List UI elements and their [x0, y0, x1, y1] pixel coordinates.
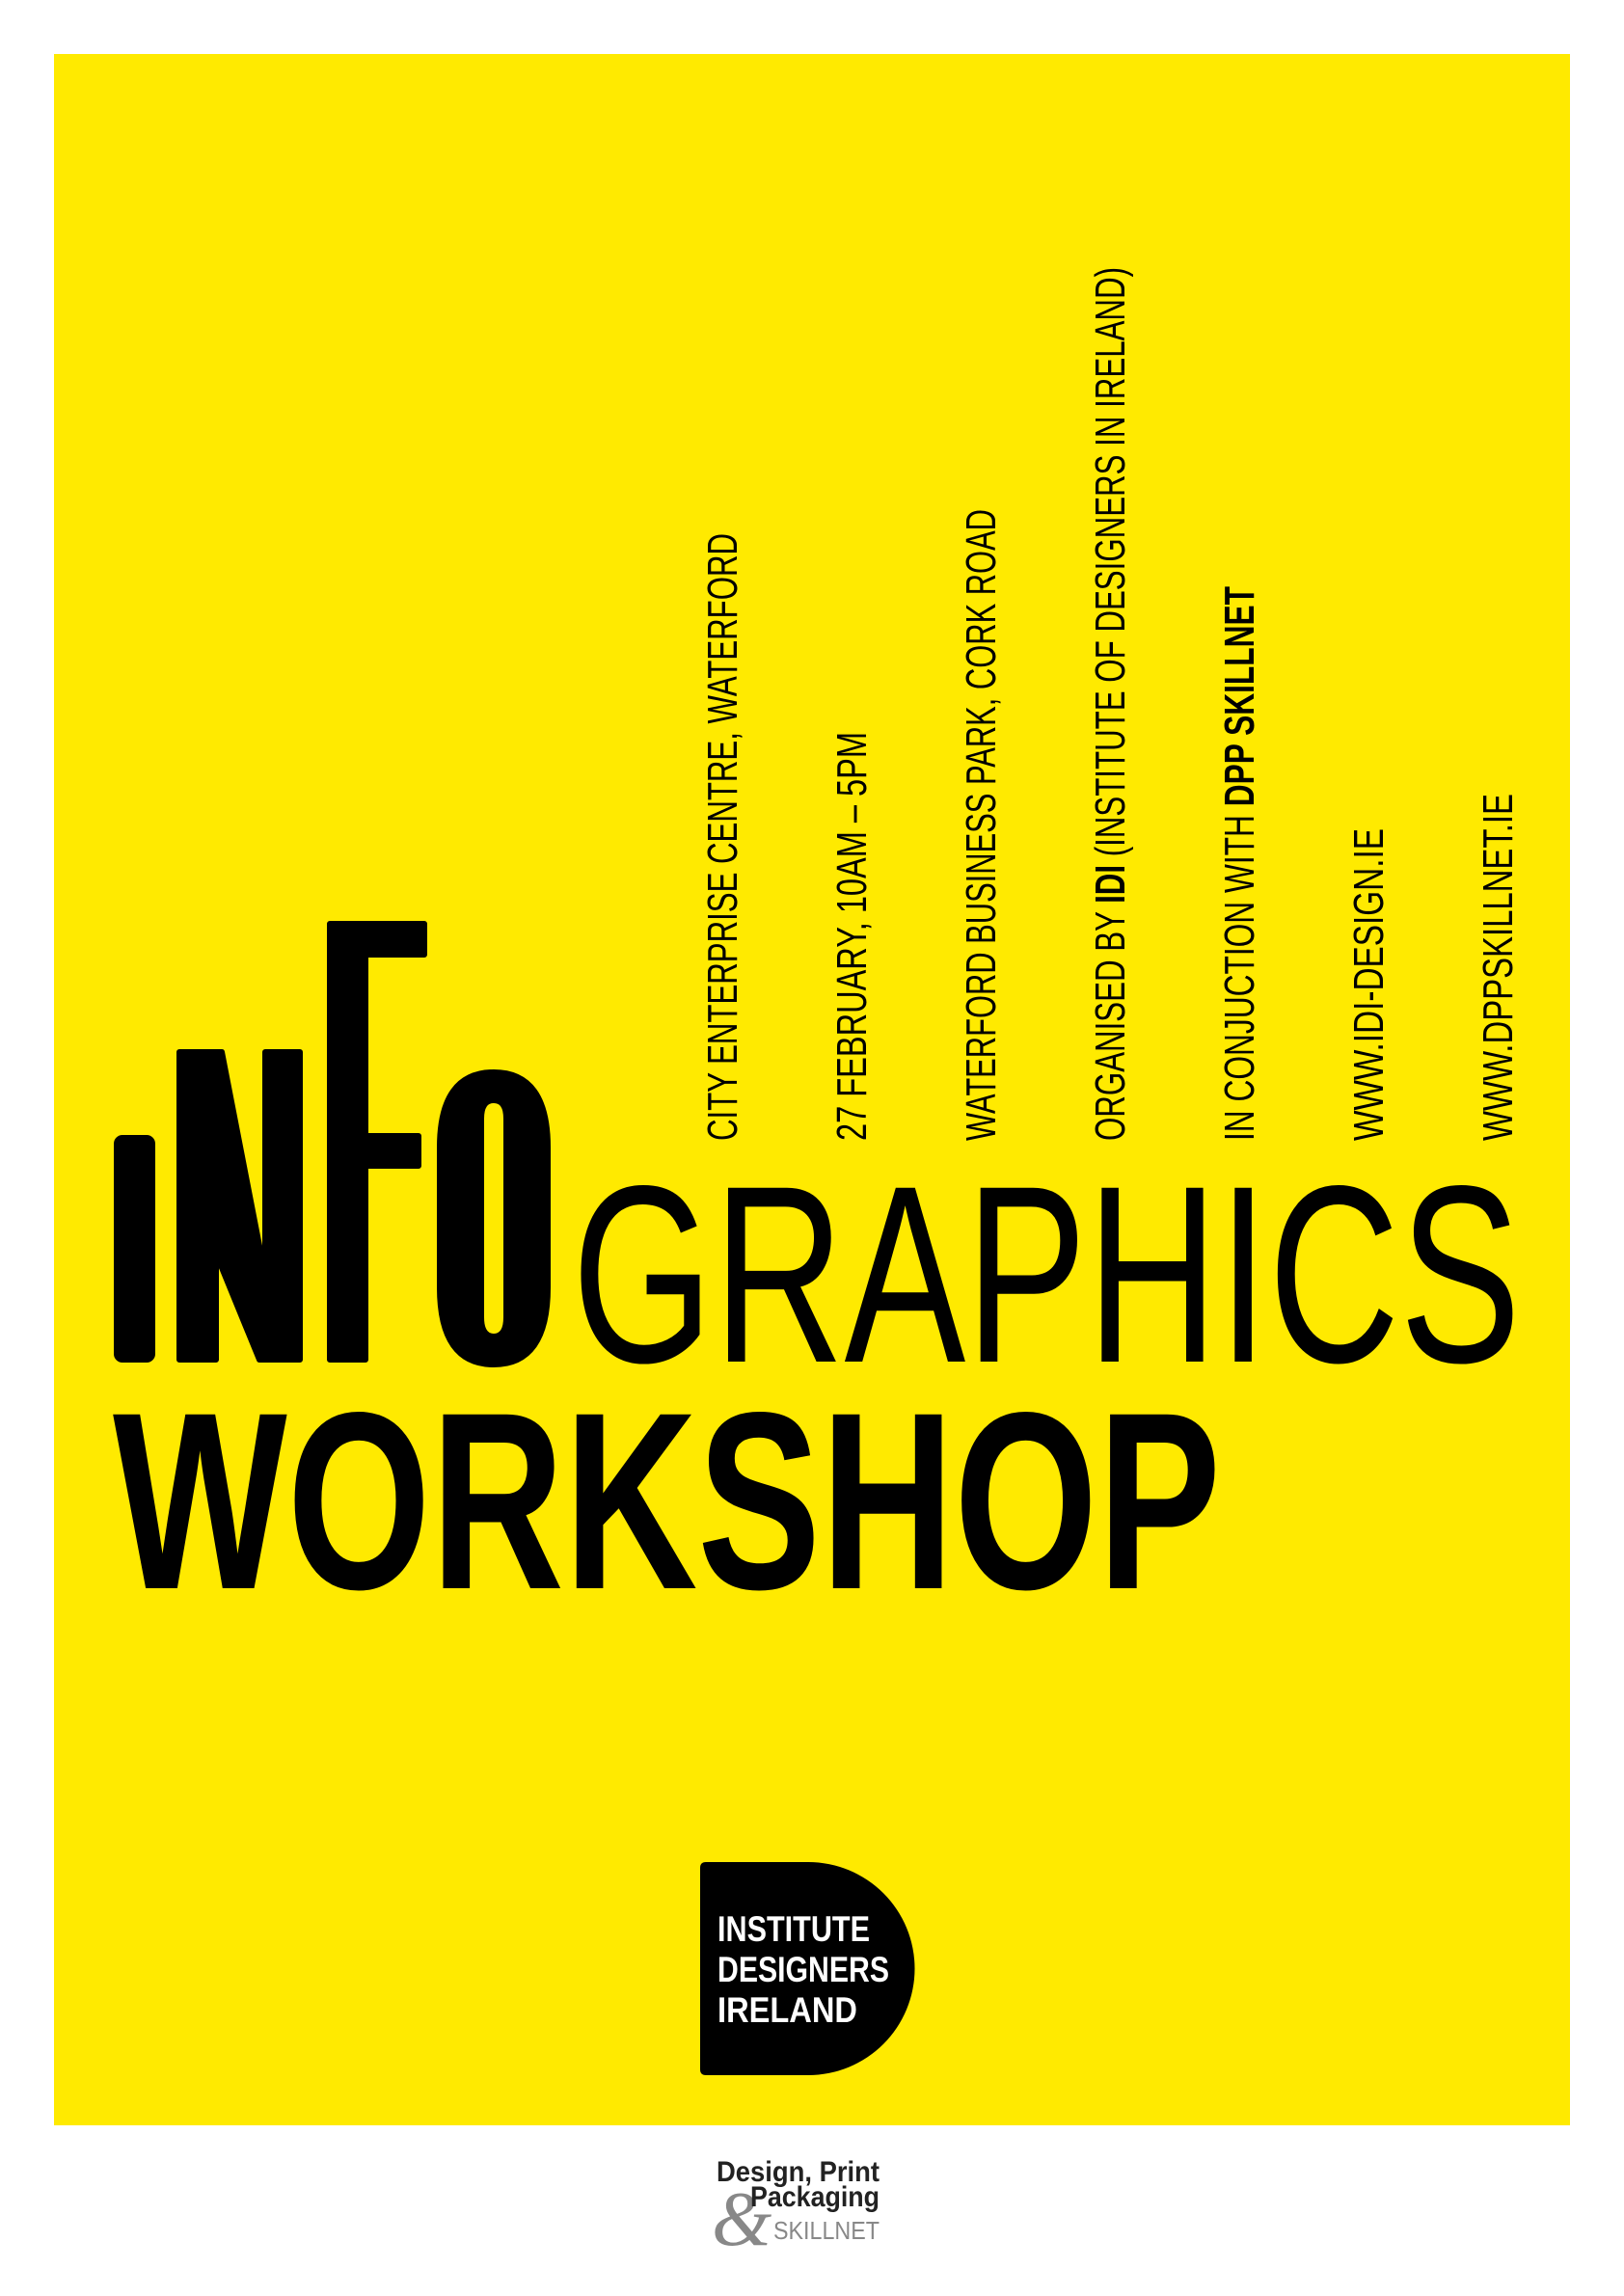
- letter i: [117, 1138, 152, 1360]
- letter F: [330, 924, 424, 1360]
- logo: Institute Designers Ireland: INSTITUTE: [717, 1909, 870, 1949]
- logo: Institute Designers Ireland: IRELAND: [717, 1990, 857, 2030]
- detail: address: WATERFORD BUSINESS PARK, CORK ROAD: [958, 509, 1005, 1141]
- logo: Design Print Packaging Skillnet: [712, 2156, 880, 2262]
- logo: Institute Designers Ireland: [700, 1862, 914, 2075]
- logo: Design Print Packaging Skillnet: Packaging: [750, 2181, 880, 2213]
- detail: venue: CITY ENTERPRISE CENTRE, WATERFORD: [699, 533, 746, 1141]
- detail: date: 27 FEBRUARY, 10AM – 5PM: [828, 732, 876, 1141]
- title: WORKSHOP: WORKSHOP: [113, 1360, 1221, 1642]
- detail: partner: IN CONJUCTION WITH DPP SKILLNET: [1216, 586, 1263, 1141]
- text block: event details (vertical): [699, 267, 1522, 1141]
- letter O: [440, 1072, 548, 1364]
- detail: organiser: ORGANISED BY IDI (INSTITUTE OF DESIGNERS IN IRELAND): [1087, 267, 1134, 1141]
- logo: Design Print Packaging Skillnet: SKILLNET: [773, 2216, 880, 2245]
- logo: Institute Designers Ireland: DESIGNERS: [717, 1950, 889, 1989]
- logo: Design Print Packaging Skillnet: Design, Print: [717, 2156, 880, 2188]
- title: iNFO: [117, 924, 548, 1364]
- detail: website idi: WWW.IDI-DESIGN.IE: [1345, 828, 1393, 1141]
- detail: website dpp: WWW.DPPSKILLNET.IE: [1475, 794, 1522, 1141]
- letter N: [179, 1052, 300, 1360]
- icon: ampersand: &: [712, 2177, 771, 2262]
